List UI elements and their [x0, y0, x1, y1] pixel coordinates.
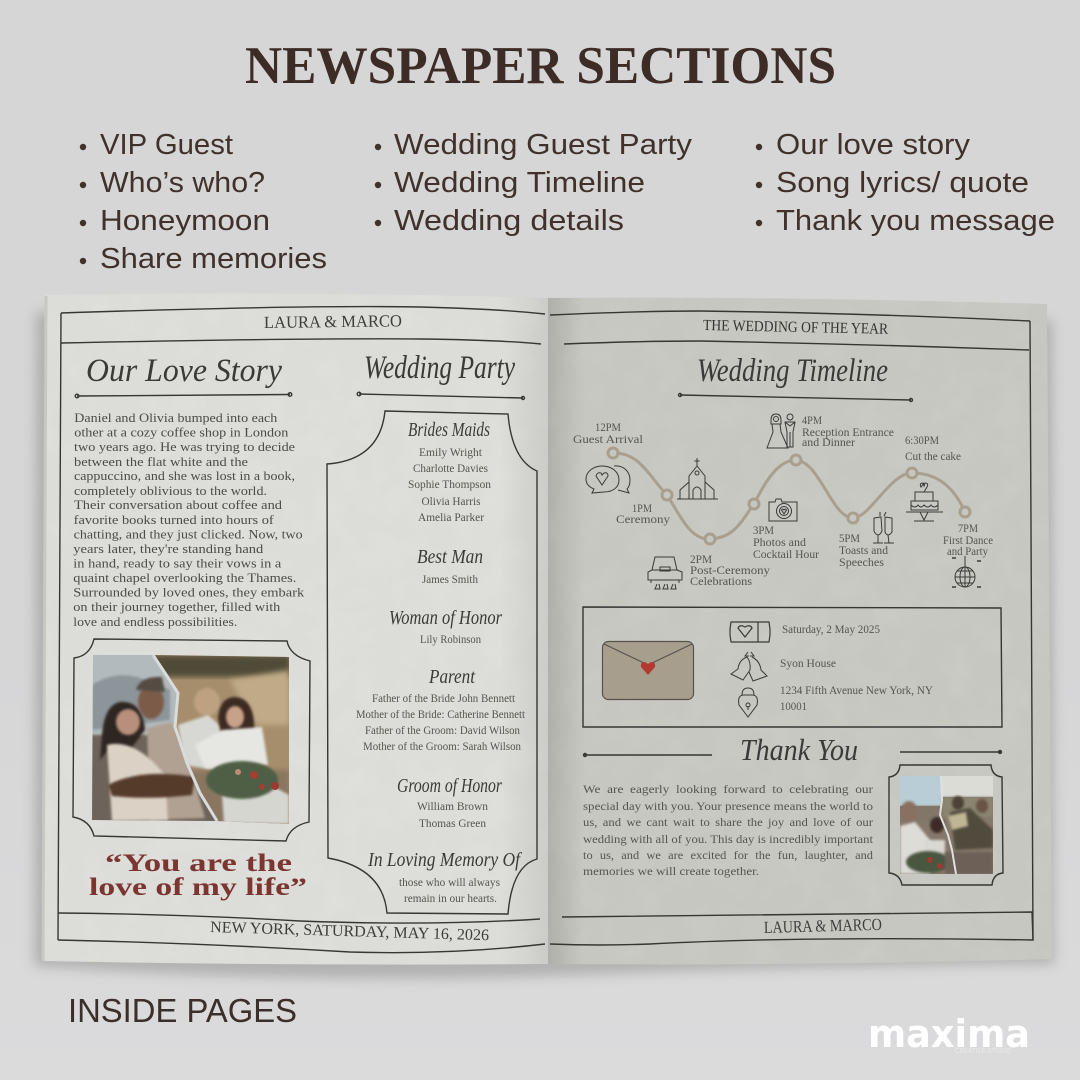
- text block: thank you: [583, 782, 874, 878]
- timeline labels: Speeches: [839, 555, 884, 569]
- wedding party list: Woman of Honor: [389, 607, 502, 629]
- wedding party list: James Smith: [422, 572, 478, 586]
- footer: Laura and Marco: LAURA & MARCO: [764, 915, 882, 937]
- text: address: [780, 683, 933, 713]
- bullet list: column 2: Wedding Guest Party: [394, 129, 693, 161]
- timeline chart: [608, 448, 970, 544]
- text: address: 10001: [780, 699, 807, 713]
- wedding party list: Best Man: [417, 546, 483, 568]
- text block: thank you: We are eagerly looking forward to celebrating our: [583, 782, 873, 796]
- timeline labels: 12PM: [595, 420, 621, 434]
- timeline labels: Guest Arrival: [573, 432, 644, 446]
- wedding party list: Charlotte Davies: [413, 461, 488, 475]
- timeline labels: 4PM: [802, 413, 822, 427]
- wedding party list: Father of the Groom: David Wilson: [365, 723, 520, 737]
- icon: church: [677, 458, 718, 499]
- bullet list: column 3: Our love story: [776, 129, 971, 161]
- icon: camera: [769, 499, 797, 521]
- heading: Thank You: Thank You: [740, 732, 858, 767]
- bullet list: column 2: [375, 129, 693, 237]
- footer rules left: [58, 913, 545, 953]
- wedding party list: Sophie Thompson: [408, 477, 491, 491]
- wedding party list: In Loving Memory Of: [367, 849, 522, 871]
- panel: left newspaper page: [40, 280, 550, 980]
- timeline labels: Cut the cake: [905, 449, 961, 463]
- wedding party list: William Brown: [417, 799, 488, 813]
- header: wedding of the year: THE WEDDING OF THE YEAR: [703, 317, 889, 338]
- text: venue: Syon House: [780, 656, 836, 670]
- text block: love story: love and endless possibilities.: [73, 614, 237, 629]
- timeline labels: Reception Entrance: [802, 425, 894, 439]
- bullet list: column 1: [80, 129, 327, 275]
- timeline labels: Ceremony: [616, 512, 670, 526]
- timeline labels: 6:30PM: [905, 433, 939, 447]
- text block: love story: cappuccino, and she was lost in a book,: [74, 468, 295, 483]
- text block: thank you: wedding with all of you. This day is incredibly important: [583, 832, 874, 846]
- header: Laura and Marco: LAURA & MARCO: [264, 311, 402, 332]
- timeline labels: 7PM: [958, 521, 978, 535]
- text block: love story: completely oblivious to the world.: [74, 483, 267, 498]
- photo frame: small: [889, 765, 1003, 885]
- text block: love story: on their journey together, filled with: [73, 599, 281, 614]
- footer: date line: NEW YORK, SATURDAY, MAY 16, 2026: [210, 919, 489, 944]
- wedding party list: Father of the Bride John Bennett: [372, 691, 516, 705]
- bullet list: column 2: Wedding Timeline: [394, 167, 645, 199]
- timeline labels: 5PM: [839, 531, 860, 545]
- timeline labels: [573, 413, 993, 588]
- icon: envelope: [602, 642, 694, 700]
- timeline labels: 3PM: [753, 523, 774, 537]
- bullet list: column 1: Share memories: [100, 243, 327, 275]
- timeline labels: First Dance: [943, 533, 993, 547]
- icon: disco ball: [952, 556, 981, 587]
- icon: champagne glasses: [873, 512, 894, 543]
- text block: thank you: us, and we cant wait to share the joy and love of our: [583, 815, 873, 829]
- text block: love story: [73, 410, 305, 629]
- pull quote: [89, 850, 307, 901]
- icon: ticket: [730, 622, 770, 642]
- photo: couple torn collage: [90, 650, 290, 825]
- text block: thank you: special day with you. Your presence means the world to: [583, 799, 873, 813]
- wedding party list: remain in our hearts.: [404, 891, 497, 905]
- text block: love story: other at a cozy coffee shop in London: [74, 424, 289, 440]
- bullet list: column 3: [756, 129, 1055, 237]
- wedding party list: Lily Robinson: [420, 632, 481, 646]
- divider: wedding party: [357, 392, 524, 400]
- text block: love story: years later, they're standing hand: [73, 541, 264, 556]
- divider: timeline: [678, 394, 912, 402]
- icon: chat hearts: [586, 466, 630, 493]
- divider: love story: [75, 393, 292, 398]
- panel: right newspaper page: [548, 290, 1058, 970]
- wedding party list: Emily Wright: [419, 445, 483, 459]
- bullet list: column 3: Thank you message: [776, 205, 1055, 237]
- pull quote: “You are the: [105, 850, 292, 877]
- heading: wedding party: Wedding Party: [364, 350, 515, 386]
- text block: love story: in hand, ready to say their vows in a: [73, 556, 282, 570]
- wedding party list: Thomas Green: [419, 816, 486, 830]
- logo: maxima: maxima: [868, 1012, 1030, 1056]
- wedding party list: Parent: [428, 666, 475, 688]
- pull quote: love of my life”: [89, 874, 307, 901]
- timeline labels: 1PM: [632, 501, 652, 515]
- icon: bells: [731, 652, 767, 681]
- panel: wedding details box: [583, 607, 1002, 727]
- timeline labels: Photos and: [753, 535, 806, 549]
- header rules right: [550, 311, 1033, 940]
- text block: thank you: memories we will create together.: [583, 864, 759, 878]
- caption: inside pages: INSIDE PAGES: [68, 992, 297, 1029]
- text block: love story: Daniel and Olivia bumped into each: [74, 410, 278, 425]
- photo frame: couple: [73, 639, 310, 841]
- heading: Wedding Timeline: Wedding Timeline: [697, 353, 888, 389]
- icon: bride and groom: [767, 414, 795, 448]
- bullet list: column 1: Who’s who?: [100, 167, 265, 199]
- header rules left: [58, 307, 545, 940]
- timeline labels: Celebrations: [690, 574, 752, 588]
- text block: love story: between the flat white and the: [74, 454, 248, 469]
- wedding party list: those who will always: [399, 875, 500, 889]
- timeline labels: Toasts and: [839, 543, 888, 557]
- newspaper drop shadow: [34, 312, 1054, 978]
- logo: maxima: CREATIVE STUDIO: [955, 1048, 1011, 1055]
- wedding party list: Mother of the Bride: Catherine Bennett: [356, 707, 526, 721]
- panel: wedding party frame: [327, 411, 537, 914]
- divider: thank you: [584, 750, 1002, 756]
- wedding party list: Mother of the Groom: Sarah Wilson: [363, 739, 521, 753]
- footer rules right: [550, 912, 1033, 945]
- wedding party list: [356, 419, 526, 905]
- text: date: Saturday, 2 May 2025: [782, 622, 880, 636]
- photo: small collage: [900, 776, 993, 874]
- text block: love story: Their conversation about coffee and: [74, 497, 283, 512]
- timeline labels: Cocktail Hour: [753, 547, 819, 561]
- text block: love story: Surrounded by loved ones, they embark: [73, 584, 305, 600]
- text block: love story: quaint chapel overlooking the Thames.: [73, 570, 296, 585]
- text block: thank you: to us, and we are excited for the fun, laughter, and: [583, 848, 873, 862]
- bullet list: column 3: Song lyrics/ quote: [776, 167, 1029, 199]
- bullet list: column 1: VIP Guest: [100, 129, 233, 161]
- icon: wedding car: [648, 557, 682, 589]
- timeline labels: and Party: [947, 544, 988, 558]
- icon: heart lock: [739, 688, 757, 717]
- wedding party list: Olivia Harris: [422, 494, 481, 508]
- wedding party list: Amelia Parker: [418, 510, 484, 524]
- text: address: 1234 Fifth Avenue New York, NY: [780, 683, 933, 697]
- text block: love story: favorite books turned into hours of: [74, 512, 274, 527]
- wedding party list: Brides Maids: [408, 419, 490, 441]
- text block: love story: two years ago. He was trying to decide: [74, 439, 295, 454]
- bullet list: column 1: Honeymoon: [100, 205, 270, 237]
- timeline labels: and Dinner: [802, 435, 855, 449]
- heading: Our Love Story: Our Love Story: [86, 353, 282, 389]
- icon: cake: [906, 483, 943, 521]
- timeline labels: 2PM: [690, 552, 712, 566]
- bullet list: column 2: Wedding details: [394, 205, 624, 237]
- wedding party list: Groom of Honor: [397, 775, 502, 797]
- title: NEWSPAPER SECTIONS: [245, 37, 836, 95]
- timeline labels: Post-Ceremony: [690, 563, 770, 577]
- text block: love story: chatting, and they just clicked. Now, two: [74, 526, 303, 542]
